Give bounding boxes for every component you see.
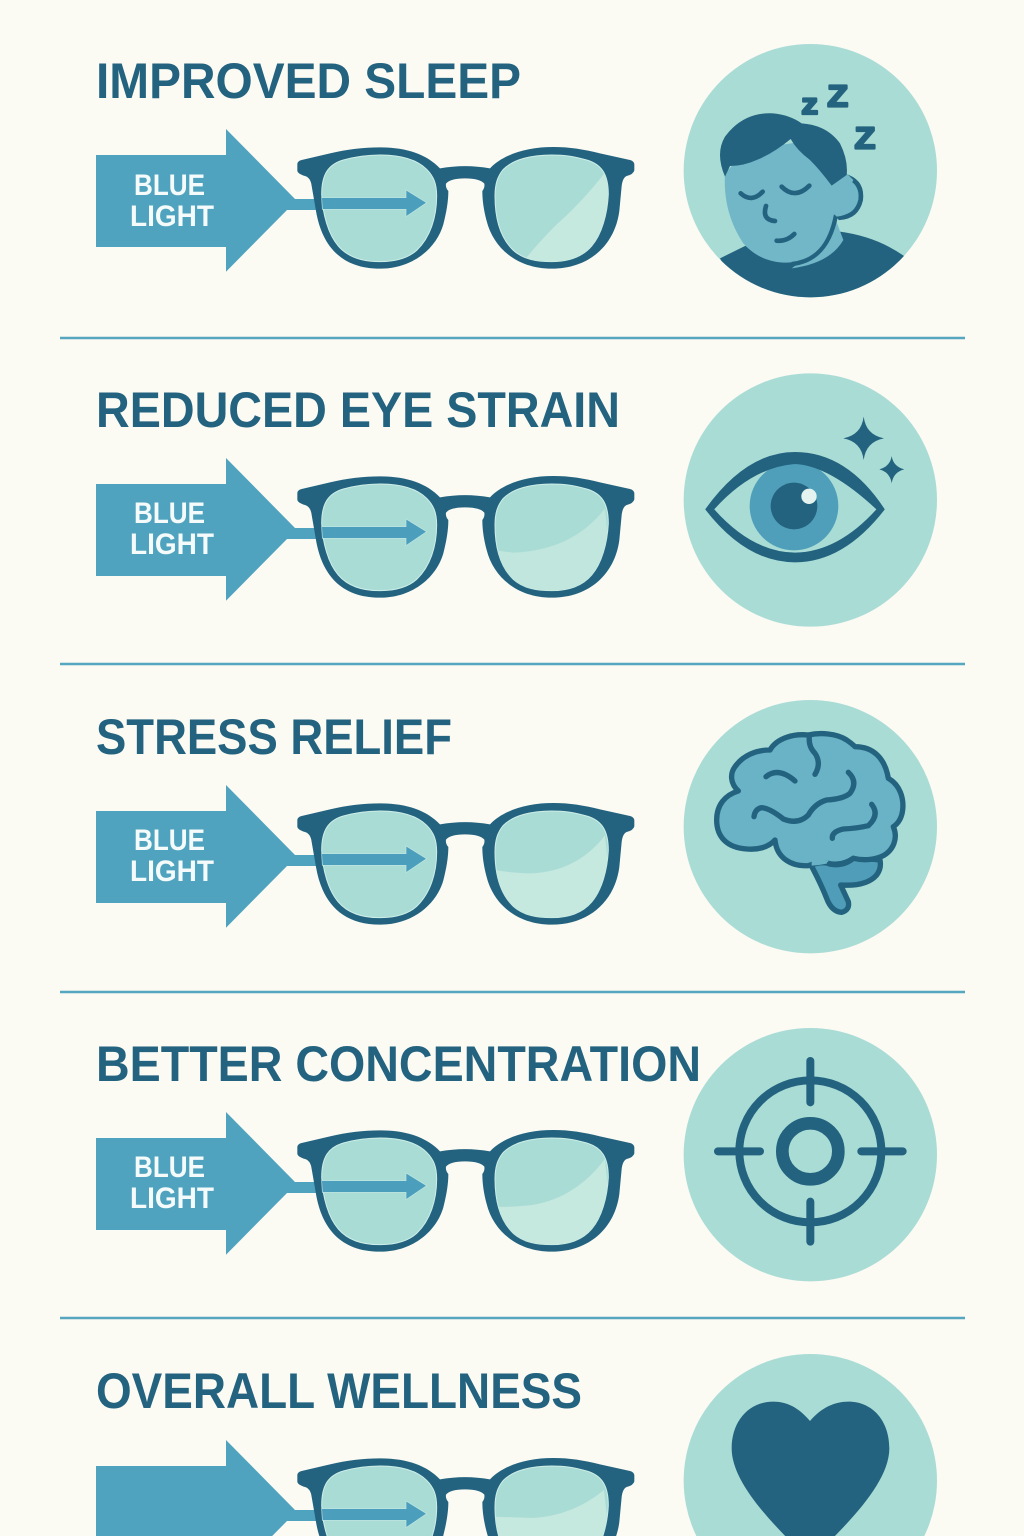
arrow: blue light: LIGHT [130, 528, 214, 561]
arrow: blue light: LIGHT [130, 855, 214, 888]
arrow: blue light: LIGHT [130, 200, 214, 233]
arrow: blue light [96, 458, 320, 601]
panel: reduced eye strain [96, 373, 937, 627]
icon: heart [684, 1354, 937, 1536]
icon: sleeping person: Z [855, 122, 875, 156]
icon: glasses [297, 803, 634, 925]
icon: sleeping person: Z [827, 80, 848, 114]
icon: target [684, 1028, 937, 1281]
arrow: blue light [96, 1440, 320, 1536]
heading: reduced eye strain: REDUCED EYE STRAIN [96, 382, 620, 438]
heading: improved sleep: IMPROVED SLEEP [96, 53, 521, 109]
arrow: blue light: BLUE [134, 824, 205, 857]
arrow: blue light [96, 129, 320, 272]
arrow: blue light: BLUE [134, 169, 205, 202]
panel: stress relief [96, 700, 937, 953]
icon: glasses [297, 147, 634, 269]
icon: glasses [297, 1130, 634, 1252]
icon: eye with sparkles [684, 373, 937, 627]
arrow: blue light: LIGHT [130, 1182, 214, 1215]
icon: sleeping person: z [801, 88, 818, 121]
icon: glasses [297, 476, 634, 598]
heading: stress relief: STRESS RELIEF [96, 709, 452, 765]
arrow: blue light: BLUE [134, 497, 205, 530]
heading: better concentration: BETTER CONCENTRATION [96, 1036, 701, 1092]
icon: sleeping person [684, 44, 937, 307]
panel: better concentration [96, 1028, 937, 1281]
panel: overall wellness [96, 1354, 937, 1536]
icon: brain [684, 700, 937, 953]
arrow: blue light [96, 1112, 320, 1255]
icon: glasses [297, 1458, 634, 1536]
arrow: blue light [96, 785, 320, 928]
arrow: blue light: BLUE [134, 1151, 205, 1184]
panel: improved sleep [96, 44, 937, 307]
heading: overall wellness: OVERALL WELLNESS [96, 1363, 582, 1419]
